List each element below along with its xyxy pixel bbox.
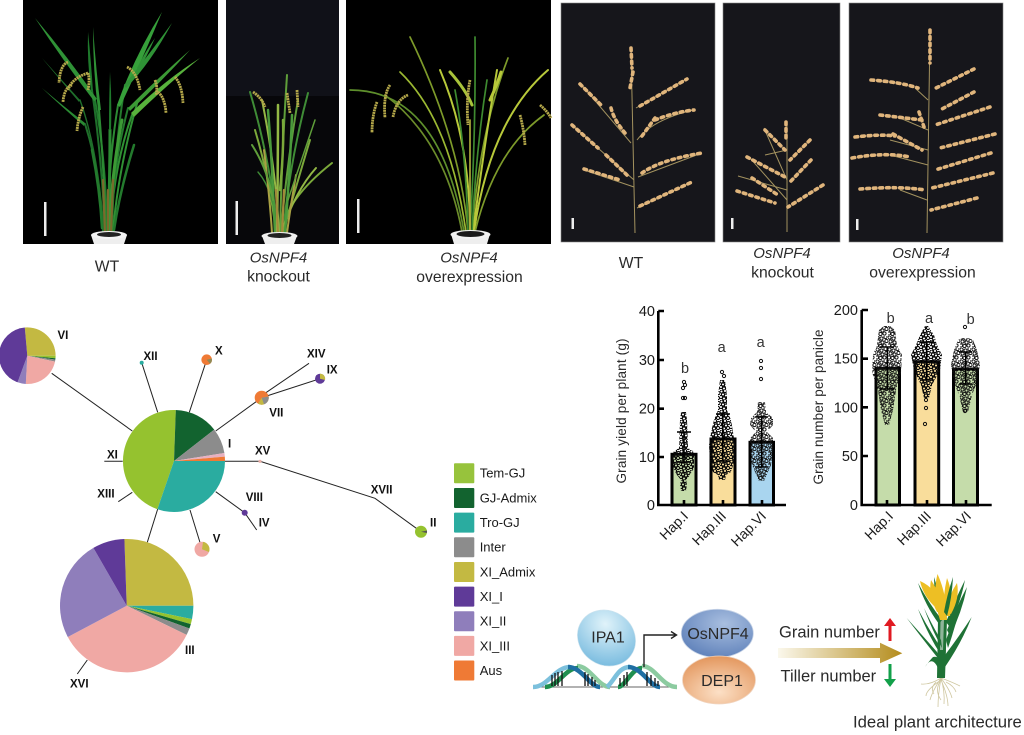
caption: OsNPF4 overexpression panicle: OsNPF4 [892,245,950,262]
WT pot [91,231,127,244]
y axis title: Grain yield per plant (g) [614,338,629,484]
legend: XI_I [480,589,503,604]
haplotype labels: V [213,534,221,546]
haplotype labels: XI [107,449,118,461]
gradient arrow [778,643,902,663]
x labels [656,508,769,549]
green down arrow [884,664,896,687]
OsNPF4 ellipse: OsNPF4 [687,626,749,643]
haplotype labels: X [215,345,223,357]
icon: ideal rice plant [907,574,972,707]
scatter points [672,359,773,491]
red up arrow [884,618,896,641]
haplotype labels: IV [259,518,270,530]
DNA helix [533,666,677,687]
legend: GJ-Admix [480,490,537,505]
DEP1 ellipse: DEP1 [701,673,743,690]
panel: knockout whole plant photo [226,0,339,244]
error bars [677,414,768,467]
haplotype labels: XIV [307,349,326,361]
legend: XI_Admix [480,564,536,579]
haplotype labels: IX [327,365,338,377]
y tick labels: 150 [834,352,858,368]
haplotype labels [58,330,436,691]
WT plant leaf blades [35,12,200,130]
y tick labels: 30 [639,353,655,369]
overexpression pot [450,230,490,244]
y tick labels: 10 [639,450,655,466]
upper dark leaf [944,577,953,616]
WT panicle grains [572,48,702,206]
small pies [140,354,427,557]
grain number label: Grain number [779,624,880,642]
scale bar [357,199,360,233]
y tick labels: 20 [639,402,655,418]
caption: WT panicle: WT [619,255,644,272]
significance letters: a [925,311,934,327]
y tick labels: 50 [842,449,858,465]
knockout panicle axis [738,122,787,232]
pie: haplotype VI [0,327,56,384]
y tick labels: 0 [850,498,858,514]
significance letters: b [681,361,689,377]
y tick labels: 0 [647,498,655,514]
network links [52,360,421,674]
x labels: Hap.I [861,508,896,543]
panel: knockout panicle photo [723,3,840,242]
haplotype labels: XVI [70,679,89,691]
axes and ticks [658,311,786,505]
tiller number label: Tiller number [780,668,877,686]
scale bar [856,219,858,230]
caption: OsNPF4 knockout panicle: OsNPF4 [753,245,811,262]
knockout pot [262,232,298,244]
regulatory model [533,574,1022,732]
y tick labels [834,303,858,514]
caption: OsNPF4 knockout plant: OsNPF4 [250,250,307,266]
scale bar [236,201,238,235]
axes and ticks [862,310,992,505]
significance letters: a [718,340,727,356]
legend: Tem-GJ [480,466,525,481]
significance letters: b [887,311,895,327]
significance letters: b [967,312,975,328]
knockout plant leaves [250,75,332,235]
promoter arrow [644,632,676,667]
haplotype labels: VIII [246,492,263,504]
y tick labels [639,304,655,514]
IPA1 ellipse: IPA1 [591,630,625,646]
overexpression panicle grains [852,30,995,210]
roots [921,678,960,707]
haplotype labels: II [430,518,436,530]
scale bar [731,218,734,229]
y tick labels: 40 [639,304,655,320]
legend: XI_III [480,638,510,653]
bar chart: grain yield per plant [614,304,786,549]
overexpression panicles [372,80,551,145]
scale bar [44,202,46,236]
x labels: Hap.III [689,508,729,548]
bars [876,362,978,505]
legend [454,463,537,680]
haplotype labels: VI [58,330,68,342]
caption: OsNPF4 overexpression plant: overexpression [416,269,523,286]
WT panicle axis [572,50,702,233]
significance letters [887,311,975,328]
haplotype labels: VII [269,408,283,420]
y axis title: Grain number per panicle [811,330,826,484]
DEP1 ellipse [682,656,756,704]
bar chart: grain number per panicle [811,303,992,549]
overexpression plant leaves [350,37,548,232]
ideal plant architecture label: Ideal plant architecture [853,713,1022,732]
haplotype labels: I [228,439,231,451]
yellow panicles [920,574,958,620]
scatter points [872,325,980,426]
IPA1 ellipse [566,599,647,677]
x labels: Hap.I [656,508,691,543]
OsNPF4 ellipse [681,609,753,657]
error bars [880,342,972,389]
scale bar [572,218,574,229]
central pie: haplotype I [123,410,225,512]
knockout panicle grains [737,122,823,207]
WT plant stems [80,85,138,234]
significance letters [681,335,766,377]
WT plant panicles [59,62,183,131]
x labels: Hap.III [894,508,934,548]
x labels: Hap.VI [728,508,769,549]
caption: OsNPF4 overexpression panicle: overexpression [869,264,976,282]
panel: WT whole plant photo [23,0,218,244]
legend: Aus [480,663,503,678]
haplotype labels: XII [144,351,158,363]
caption: OsNPF4 knockout panicle: knockout [751,264,815,282]
panel: WT panicle photo [561,3,715,242]
significance letters: a [757,335,766,351]
x labels [861,508,974,549]
panel: overexpression panicle photo [849,3,1003,242]
stem [937,620,947,678]
pie: haplotype III [60,539,193,672]
x labels: Hap.VI [933,508,974,549]
haplotype labels: XIII [97,488,115,500]
y tick labels: 200 [834,303,858,319]
bars [672,439,774,505]
y tick labels: 100 [834,400,858,416]
haplotype labels: III [185,645,195,657]
leaves [907,577,972,668]
haplotype labels: XV [255,445,271,457]
caption: WT plant: WT [95,258,120,276]
haplotype labels: XVII [371,484,392,496]
legend: Tro-GJ [480,515,520,530]
knockout panicles [253,90,298,113]
panel: overexpression whole plant photo [346,0,551,244]
legend: XI_II [480,614,506,629]
legend: Inter [480,540,506,555]
haplotype network [0,327,436,691]
caption: OsNPF4 overexpression plant: OsNPF4 [440,250,498,266]
caption: OsNPF4 knockout plant: knockout [247,268,311,286]
overexpression panicle axis [890,30,930,233]
